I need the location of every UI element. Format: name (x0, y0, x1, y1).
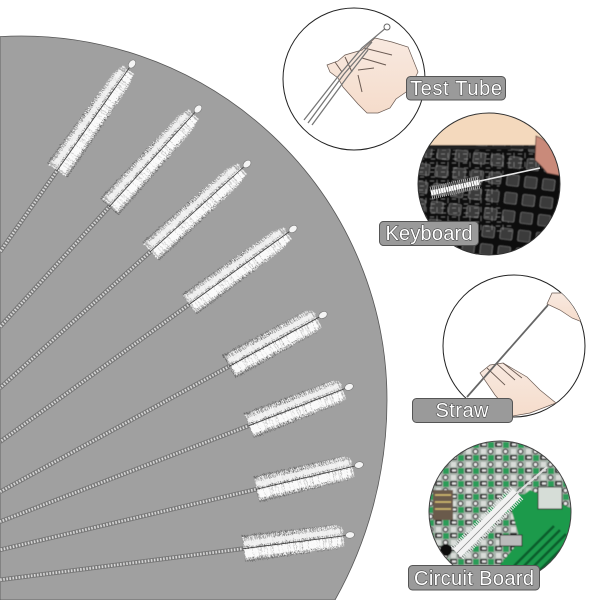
icon: brush in keyboard (431, 168, 540, 193)
icon: fingers (535, 136, 562, 176)
panel: test tube photo circle (283, 8, 425, 150)
icon: upper hand (547, 293, 582, 322)
icon: straw brush wire (467, 305, 548, 397)
label: Circuit Board: Circuit Board (414, 568, 534, 590)
brush 5 (0, 308, 329, 496)
brush 3 (0, 157, 253, 391)
label: Straw: Straw (436, 400, 489, 422)
brush 2 (0, 102, 204, 330)
panel: straw photo circle (443, 275, 585, 417)
label: Straw (412, 398, 512, 422)
brush 6 (0, 381, 355, 526)
panel: keyboard photo circle (418, 112, 560, 256)
panel: grey semicircle background (0, 36, 387, 600)
label: Test Tube: Test Tube (410, 78, 502, 100)
brush 4 (0, 222, 299, 445)
brush 7 (0, 459, 365, 555)
icon: lower hand (480, 363, 556, 416)
panel: circuit board photo circle (428, 440, 572, 572)
brush 8 (0, 529, 355, 585)
icon: brush on circuit board (457, 467, 547, 553)
brush 1 (0, 57, 138, 254)
label: Keyboard: Keyboard (386, 223, 472, 245)
icon: hand holding brush (304, 24, 418, 125)
